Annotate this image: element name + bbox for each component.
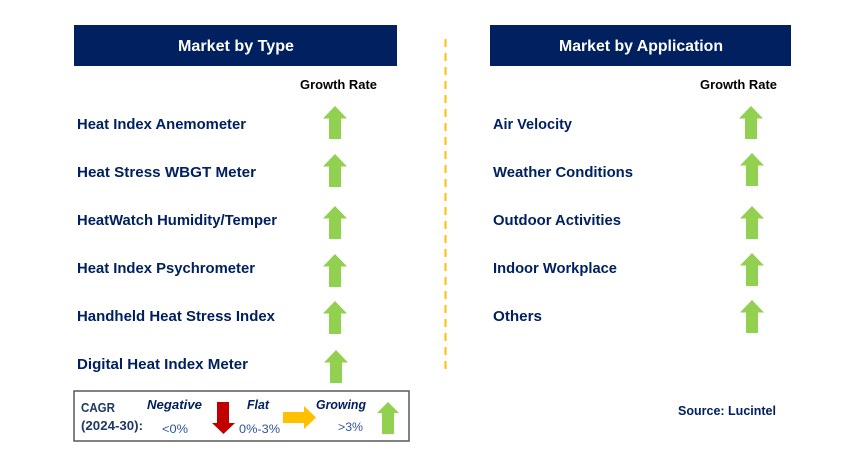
row: Air Velocity: Air Velocity bbox=[493, 117, 572, 133]
heading: market by application: Market by Application bbox=[559, 38, 723, 55]
row: Heat Index Psychrometer bbox=[77, 254, 347, 287]
row: Digital Heat Index Meter bbox=[77, 350, 348, 383]
panel: market by type bbox=[74, 25, 397, 383]
row: Outdoor Activities: Outdoor Activities bbox=[493, 213, 621, 229]
row: Indoor Workplace bbox=[493, 253, 764, 286]
row: Others: Others bbox=[493, 309, 542, 325]
legend: negative bbox=[147, 397, 235, 436]
row: Handheld Heat Stress Index bbox=[77, 301, 347, 334]
row: Digital Heat Index Meter: Digital Heat Index Meter bbox=[77, 357, 248, 373]
legend: growing: Growing bbox=[316, 397, 366, 412]
legend title bbox=[81, 400, 143, 433]
legend title: CAGR bbox=[81, 400, 116, 415]
legend: CAGR bbox=[74, 391, 409, 441]
panel: market by application bbox=[490, 25, 791, 333]
legend: growing bbox=[316, 397, 399, 434]
heading: market by type bbox=[74, 25, 397, 66]
row: Heat Stress WBGT Meter bbox=[77, 154, 347, 187]
row: HeatWatch Humidity/Temper: HeatWatch Humidity/Temper bbox=[77, 213, 277, 229]
row: Others bbox=[493, 300, 764, 333]
legend: flat: Flat bbox=[247, 397, 270, 412]
row: Weather Conditions bbox=[493, 153, 764, 186]
legend: flat: 0%-3% bbox=[239, 422, 280, 436]
legend: negative: Negative bbox=[147, 397, 202, 412]
legend: growing: >3% bbox=[338, 420, 363, 434]
row: Heat Stress WBGT Meter: Heat Stress WBGT Meter bbox=[77, 165, 256, 181]
heading: market by application bbox=[490, 25, 791, 66]
row: Outdoor Activities bbox=[493, 206, 764, 239]
divider: dashed line bbox=[444, 39, 446, 369]
row: Handheld Heat Stress Index: Handheld Heat Stress Index bbox=[77, 309, 275, 325]
source note: Source: Lucintel bbox=[678, 404, 776, 418]
label: growth rate: Growth Rate bbox=[300, 78, 377, 92]
legend title: (2024-30): bbox=[81, 418, 143, 433]
heading: market by type: Market by Type bbox=[178, 38, 294, 55]
row: Heat Index Anemometer: Heat Index Anemometer bbox=[77, 117, 246, 133]
label: growth rate: Growth Rate bbox=[700, 78, 777, 92]
row: Indoor Workplace: Indoor Workplace bbox=[493, 261, 617, 277]
legend: flat bbox=[239, 397, 316, 436]
row: Air Velocity bbox=[493, 106, 763, 139]
row: HeatWatch Humidity/Temper bbox=[77, 206, 347, 239]
row: Weather Conditions: Weather Conditions bbox=[493, 165, 633, 181]
row: Heat Index Psychrometer: Heat Index Psychrometer bbox=[77, 261, 255, 277]
legend: negative: <0% bbox=[162, 422, 188, 436]
row: Heat Index Anemometer bbox=[77, 106, 347, 139]
